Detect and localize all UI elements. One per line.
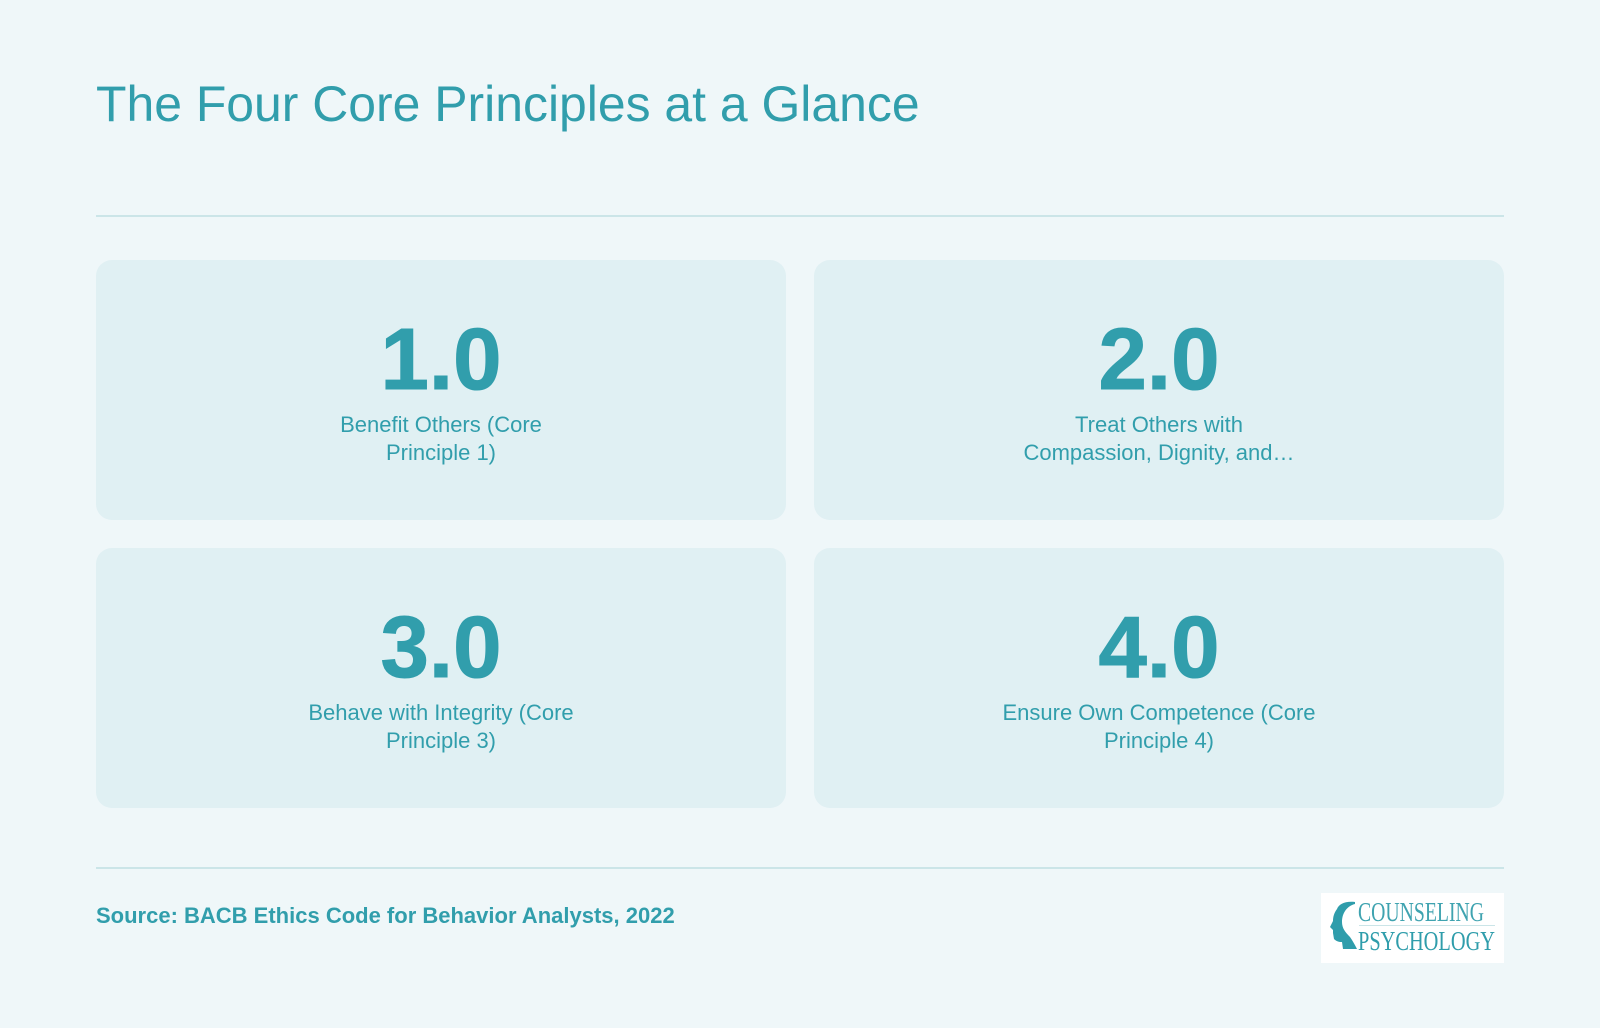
icon: head profile	[1330, 902, 1357, 949]
title: The Four Core Principles at a Glance	[96, 76, 920, 132]
number: 3.0: 3.0	[381, 599, 501, 696]
label: principle 3: Behave with Integrity (Core	[308, 700, 574, 725]
label: principle 4: Principle 4)	[1104, 728, 1214, 753]
number: 1.0: 1.0	[381, 311, 501, 408]
label: principle 2: Treat Others with	[1075, 412, 1243, 437]
panel: principle 1	[96, 260, 786, 520]
panel: principle 3	[96, 548, 786, 808]
logo: Counseling Psychology	[1321, 893, 1504, 963]
label: principle 3	[308, 700, 574, 753]
panel: principle 4	[814, 548, 1504, 808]
label: principle 2: Compassion, Dignity, and…	[1023, 440, 1295, 465]
label: principle 3: Principle 3)	[386, 728, 496, 753]
source note: Source: BACB Ethics Code for Behavior Analysts, 2022	[96, 903, 675, 928]
label: principle 1: Benefit Others (Core	[340, 412, 542, 437]
number: 4.0: 4.0	[1099, 599, 1219, 696]
label: principle 4	[1002, 700, 1316, 753]
label: principle 4: Ensure Own Competence (Core	[1002, 700, 1316, 725]
label: principle 2	[1023, 412, 1295, 465]
panel: principle 2	[814, 260, 1504, 520]
label: principle 1: Principle 1)	[386, 440, 496, 465]
label: principle 1	[340, 412, 542, 465]
number: 2.0: 2.0	[1099, 311, 1219, 408]
